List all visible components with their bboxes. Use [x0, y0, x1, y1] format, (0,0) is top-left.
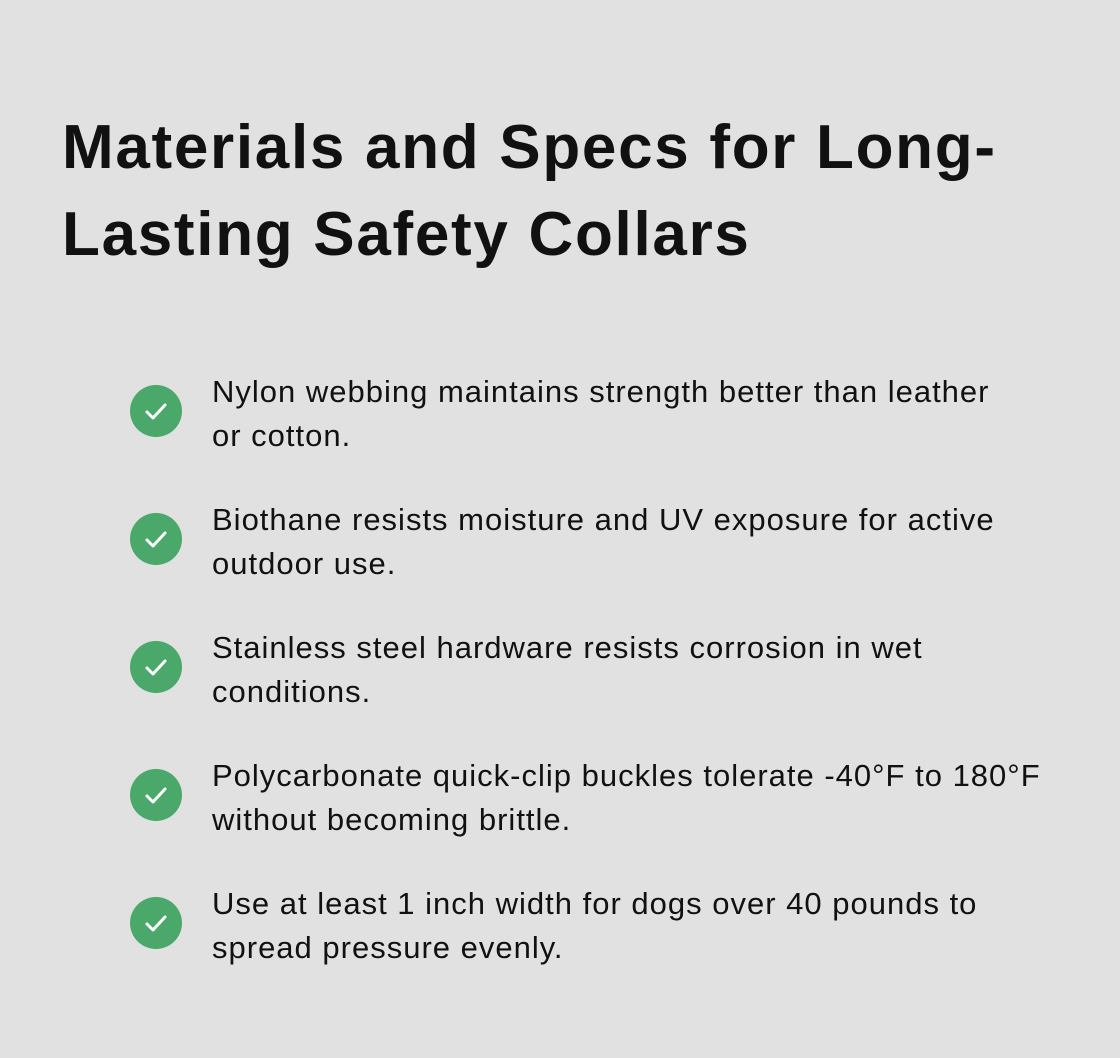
icon: check — [130, 769, 182, 821]
title: Lasting Safety Collars — [62, 200, 751, 269]
text: without becoming brittle. — [212, 802, 571, 837]
text — [212, 374, 990, 453]
text: conditions. — [212, 674, 371, 709]
item: stainless — [130, 630, 923, 709]
icon: check — [130, 641, 182, 693]
text — [212, 502, 995, 581]
text: or cotton. — [212, 418, 351, 453]
item: width — [130, 886, 977, 965]
icon: check — [130, 513, 182, 565]
text: Use at least 1 inch width for dogs over 40 pounds to — [212, 886, 977, 921]
text — [212, 886, 977, 965]
text: outdoor use. — [212, 546, 396, 581]
text — [212, 758, 1041, 837]
text: Polycarbonate quick-clip buckles tolerate -40°F to 180°F — [212, 758, 1041, 793]
item: biothane — [130, 502, 995, 581]
item: polycarbonate — [130, 758, 1041, 837]
text: Stainless steel hardware resists corrosion in wet — [212, 630, 923, 665]
text: Nylon webbing maintains strength better than leather — [212, 374, 990, 409]
text: Biothane resists moisture and UV exposure for active — [212, 502, 995, 537]
text: spread pressure evenly. — [212, 930, 564, 965]
title: Materials and Specs for Long- — [62, 113, 997, 182]
text — [212, 630, 923, 709]
title — [62, 113, 997, 269]
icon: check — [130, 897, 182, 949]
icon: check — [130, 385, 182, 437]
item: nylon — [130, 374, 990, 453]
